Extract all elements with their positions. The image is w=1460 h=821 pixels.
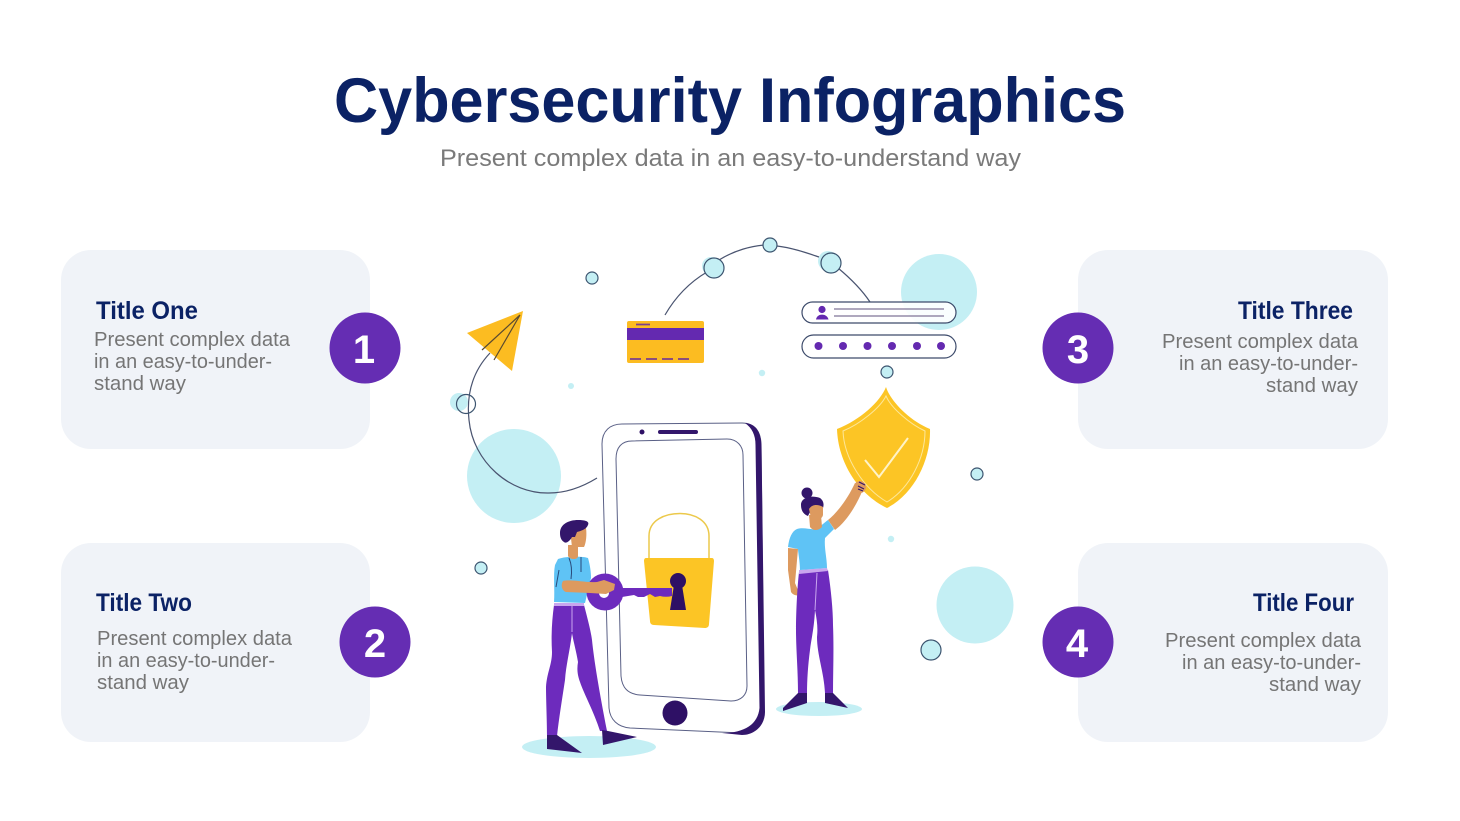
number badge 2 (340, 606, 410, 678)
text block: title four: in an easy-to-under- (1182, 652, 1361, 674)
text block: title one: stand way (94, 373, 186, 395)
text block: title three (1162, 331, 1359, 397)
person: man with key (546, 520, 672, 753)
text block: title two: Present complex data (97, 628, 293, 650)
icon: credit card (627, 321, 704, 363)
panel: title two (61, 543, 410, 742)
number badge 1 (330, 312, 400, 384)
text block: title three: in an easy-to-under- (1179, 353, 1358, 375)
icon: paper plane (467, 311, 523, 371)
heading: title two: Title Two (96, 589, 192, 617)
text block: title four (1165, 630, 1362, 696)
panel: title one (61, 250, 400, 449)
subtitle: Present complex data in an easy-to-understand way (440, 145, 1021, 172)
heading: title one: Title One (96, 297, 198, 325)
text block: title one: Present complex data (94, 329, 291, 351)
number badge 4: 4 (1066, 622, 1089, 666)
number badge 1: 1 (353, 328, 375, 372)
network nodes (456, 238, 983, 660)
text block: title two: in an easy-to-under- (97, 650, 275, 672)
person: woman holding shield (783, 481, 866, 711)
login form: password (802, 335, 956, 358)
icon: shield (837, 387, 930, 508)
connector arcs (468, 245, 870, 493)
icon: padlock (644, 514, 714, 628)
panel: title three (1042, 250, 1388, 449)
text block: title one (94, 329, 291, 395)
phone (602, 423, 765, 735)
text block: title two (97, 628, 293, 694)
central illustration (450, 238, 1014, 758)
pale background circles (450, 251, 1014, 758)
panel: title four (1042, 543, 1388, 742)
heading: title three: Title Three (1238, 297, 1353, 325)
login form: username (802, 302, 956, 323)
number badge 2: 2 (364, 622, 386, 666)
heading: title four: Title Four (1253, 589, 1354, 617)
text block: title one: in an easy-to-under- (94, 351, 272, 373)
text block: title three: stand way (1266, 375, 1358, 397)
text block: title four: stand way (1269, 674, 1361, 696)
text block: title two: stand way (97, 672, 189, 694)
number badge 3: 3 (1067, 328, 1089, 372)
text block: title three: Present complex data (1162, 331, 1359, 353)
title: Cybersecurity Infographics (334, 66, 1126, 136)
number badge 4 (1042, 606, 1114, 678)
text block: title four: Present complex data (1165, 630, 1362, 652)
number badge 3 (1042, 312, 1114, 384)
